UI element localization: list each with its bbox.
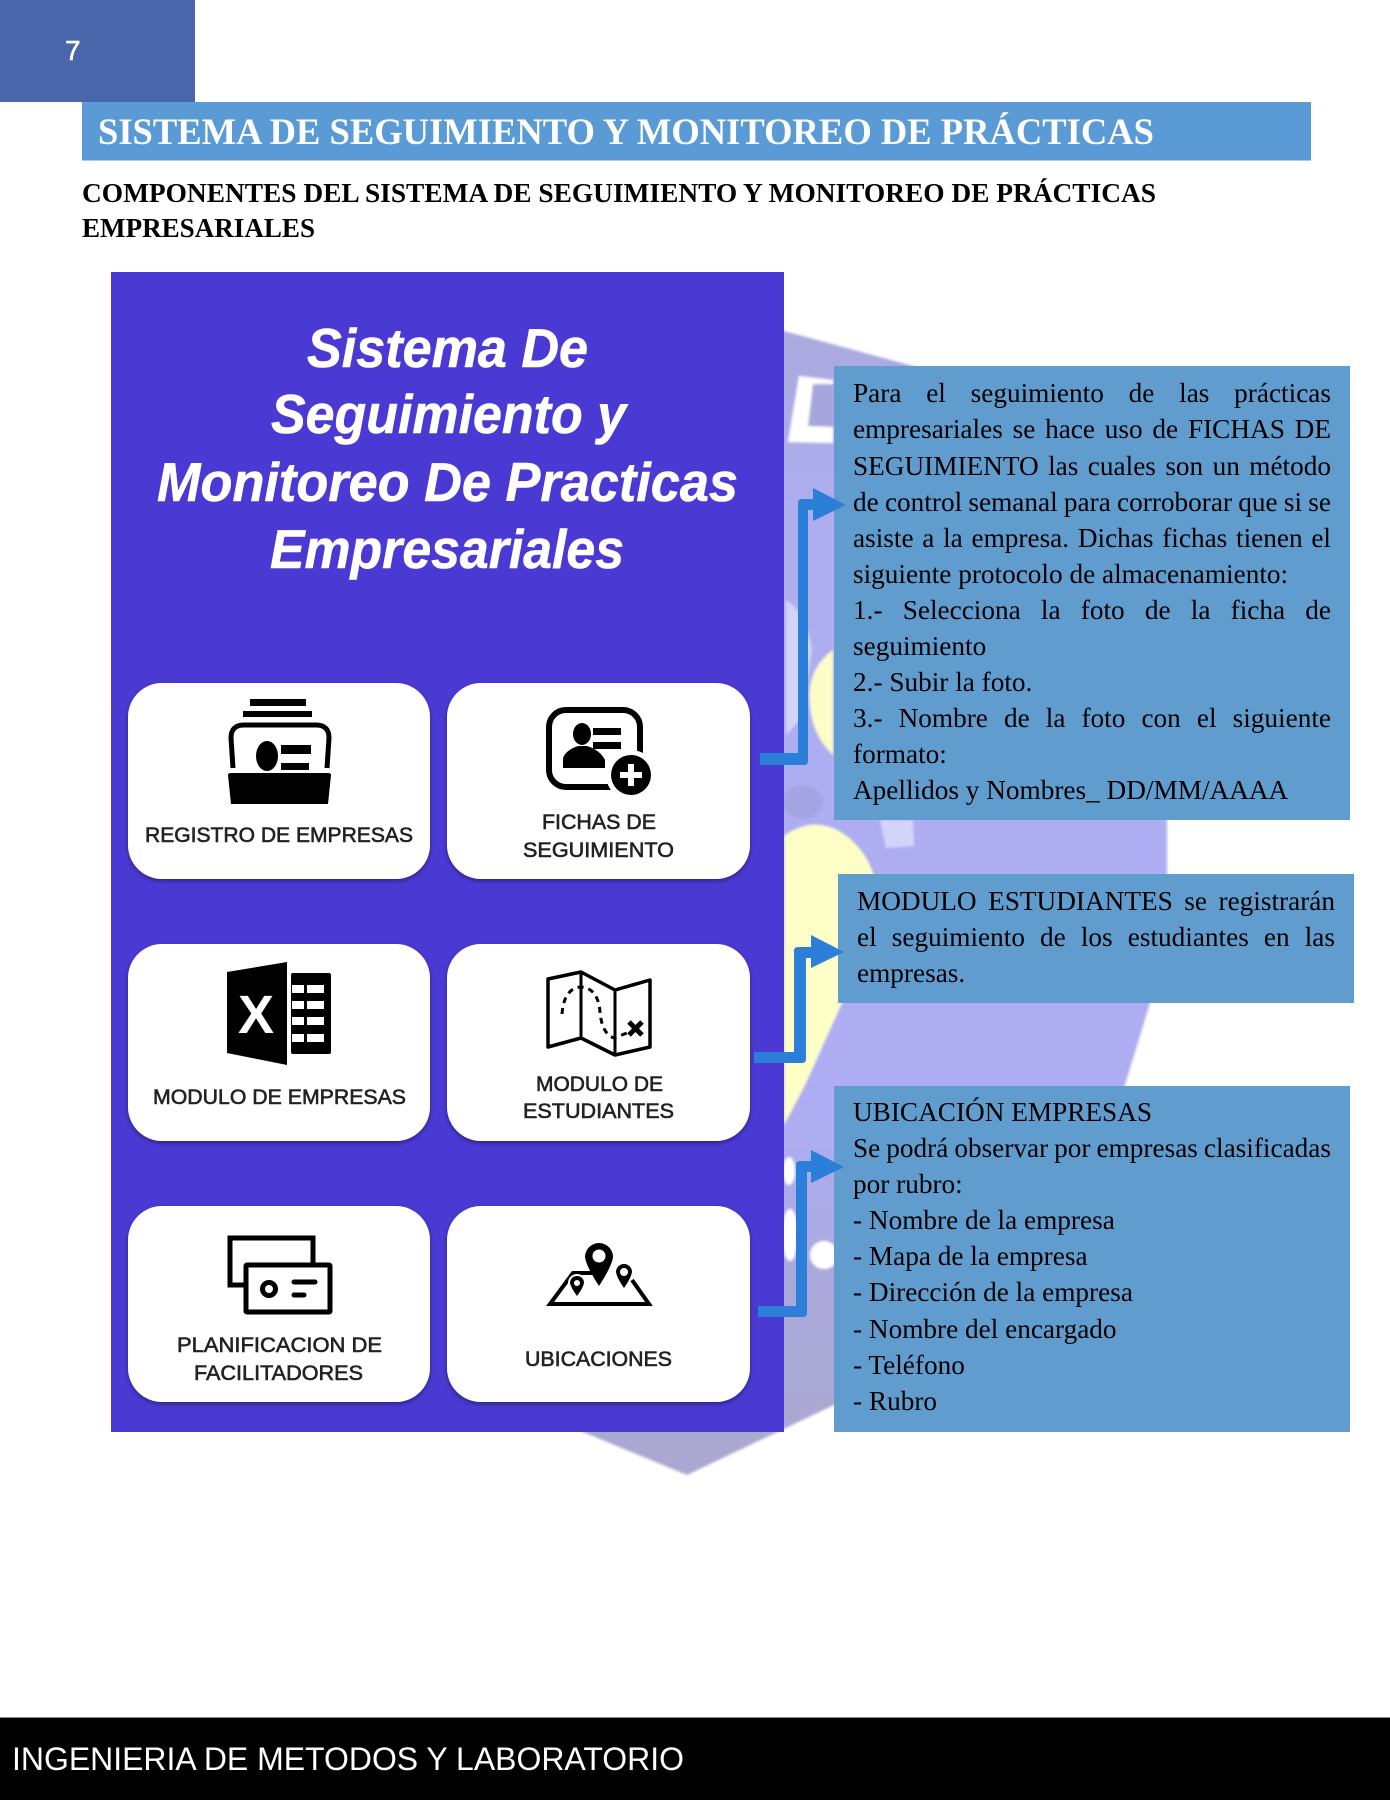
text box: fichas de seguimiento: de control semanal para corroborar que si se: [853, 487, 1331, 517]
card: modulo de estudiantes: MODULO DE: [536, 1073, 663, 1096]
page number tab: [0, 0, 195, 102]
footer bar: INGENIERIA DE METODOS Y LABORATORIO: [12, 1741, 684, 1777]
text box: modulo estudiantes: empresas.: [857, 958, 965, 988]
footer bar: [0, 1717, 1390, 1800]
text box: fichas de seguimiento: seguimiento: [853, 631, 986, 661]
app title: Sistema De: [307, 317, 588, 379]
card: fichas de seguimiento: FICHAS DE: [542, 811, 656, 834]
text box: fichas de seguimiento: 3.- Nombre de la foto con el siguiente: [853, 703, 1331, 733]
text box: fichas de seguimiento: [834, 366, 1350, 820]
card: planificacion de facilitadores: [128, 1206, 430, 1402]
text box: modulo estudiantes: [838, 874, 1354, 1003]
card: registro de empresas: [128, 683, 430, 879]
text box: fichas de seguimiento: SEGUIMIENTO las cuales son un método: [853, 451, 1331, 481]
subheading: EMPRESARIALES: [82, 213, 315, 243]
text box: ubicacion empresas: - Mapa de la empresa: [853, 1241, 1088, 1271]
icon: map: [548, 972, 650, 1055]
arrow: ubicaciones to text box: [758, 1150, 844, 1317]
icon: id card with plus: [549, 710, 656, 800]
app title: Empresariales: [270, 518, 624, 580]
card: fichas de seguimiento: [447, 683, 750, 879]
subheading: [82, 178, 1156, 243]
arrow: modulo de estudiantes to text box: [754, 935, 844, 1063]
text box: fichas de seguimiento: Apellidos y Nombres_ DD/MM/AAAA: [853, 775, 1288, 805]
card: ubicaciones: [447, 1206, 750, 1402]
card: modulo de empresas: [128, 944, 430, 1141]
text box: modulo estudiantes: MODULO ESTUDIANTES se registrarán: [857, 886, 1335, 916]
icon: map pins: [550, 1243, 649, 1304]
card: planificacion de facilitadores: PLANIFICACION DE: [177, 1334, 382, 1357]
text box: ubicacion empresas: - Dirección de la empresa: [853, 1277, 1133, 1307]
text box: fichas de seguimiento: formato:: [853, 739, 947, 769]
text box: modulo estudiantes: el seguimiento de los estudiantes en las: [857, 922, 1335, 952]
card: modulo de estudiantes: [447, 944, 750, 1141]
card: modulo de empresas: MODULO DE EMPRESAS: [153, 1086, 406, 1109]
watermark: university shield: [582, 330, 1168, 1476]
text box: ubicacion empresas: - Teléfono: [853, 1350, 965, 1380]
text box: fichas de seguimiento: 1.- Selecciona la foto de la ficha de: [853, 595, 1331, 625]
card: ubicaciones: UBICACIONES: [525, 1348, 672, 1371]
icon: spreadsheet: X: [238, 985, 274, 1045]
card: modulo de estudiantes: ESTUDIANTES: [523, 1100, 674, 1123]
text box: ubicacion empresas: UBICACIÓN EMPRESAS: [853, 1097, 1152, 1127]
text box: ubicacion empresas: por rubro:: [853, 1169, 963, 1199]
title banner: [82, 102, 1311, 161]
app title: Seguimiento y: [271, 383, 628, 445]
panel: app screen: [111, 272, 784, 1432]
title banner: SISTEMA DE SEGUIMIENTO Y MONITOREO DE PRÁCTICAS: [98, 111, 1154, 152]
text box: ubicacion empresas: - Nombre de la empresa: [853, 1205, 1115, 1235]
arrow: fichas de seguimiento to text box: [760, 488, 846, 765]
text box: ubicacion empresas: - Rubro: [853, 1386, 937, 1416]
card: fichas de seguimiento: SEGUIMIENTO: [523, 839, 674, 862]
icon: card file: [228, 699, 331, 804]
text box: ubicacion empresas: [834, 1086, 1350, 1432]
text box: fichas de seguimiento: 2.- Subir la foto.: [853, 667, 1032, 697]
text box: ubicacion empresas: - Nombre del encargado: [853, 1314, 1117, 1344]
text box: fichas de seguimiento: siguiente protocolo de almacenamiento:: [853, 559, 1288, 589]
page number tab: 7: [65, 35, 81, 66]
card: planificacion de facilitadores: FACILITADORES: [194, 1362, 363, 1385]
text box: fichas de seguimiento: asiste a la empresa. Dichas fichas tienen el: [853, 523, 1331, 553]
app title: Monitoreo De Practicas: [157, 451, 738, 513]
subheading: COMPONENTES DEL SISTEMA DE SEGUIMIENTO Y MONITOREO DE PRÁCTICAS: [82, 178, 1156, 208]
text box: fichas de seguimiento: empresariales se hace uso de FICHAS DE: [853, 414, 1331, 444]
text box: ubicacion empresas: Se podrá observar por empresas clasificadas: [853, 1133, 1331, 1163]
app title: [157, 317, 738, 580]
card: registro de empresas: REGISTRO DE EMPRESAS: [145, 824, 413, 847]
icon: overlapping cards: [230, 1238, 330, 1312]
icon: spreadsheet: [227, 962, 331, 1065]
text box: fichas de seguimiento: Para el seguimiento de las prácticas: [853, 378, 1331, 408]
